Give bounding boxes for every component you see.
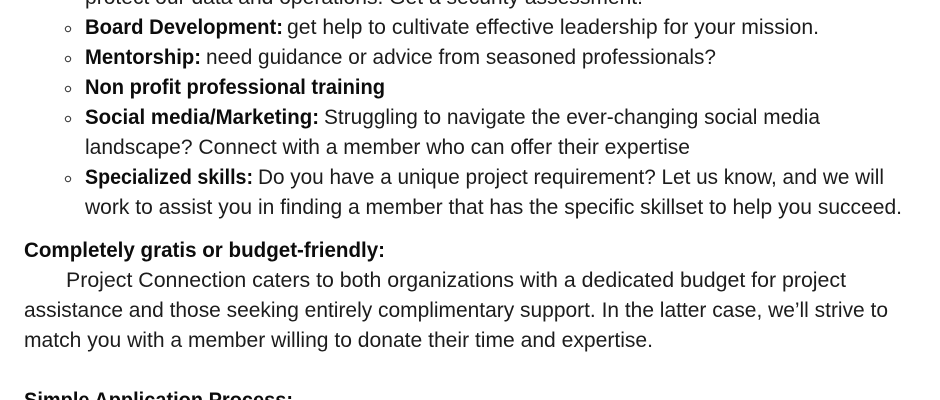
list item: specialized skills	[65, 166, 902, 219]
text block: project connection paragraph: assistance and those seeking entirely complimentary support. In the latter case, we’ll strive to	[24, 299, 888, 322]
list item: social media and marketing: Struggling to navigate the ever-changing social media	[324, 106, 820, 129]
list: services offered	[65, 0, 902, 219]
list item: social media and marketing: Social media/Marketing:	[85, 106, 319, 129]
list item: board development: Board Development:	[85, 16, 283, 39]
list item: specialized skills: Do you have a unique project requirement? Let us know, and we will	[258, 166, 884, 189]
text block: project connection paragraph: match you with a member willing to donate their time and expertise.	[24, 329, 653, 352]
list item: social media and marketing: landscape? Connect with a member who can offer their expertise	[85, 136, 690, 159]
list item: board development	[65, 16, 819, 39]
list item: non profit training: Non profit professional training	[85, 76, 385, 99]
list item: social media and marketing	[65, 106, 820, 159]
list item: specialized skills: work to assist you in finding a member that has the specific skillset to help you succeed.	[84, 196, 902, 219]
list item: specialized skills: Specialized skills:	[85, 166, 253, 189]
list item: mentorship: need guidance or advice from seasoned professionals?	[206, 46, 716, 69]
text block: project connection paragraph: Project Connection caters to both organizations with a dedicated budget for project	[66, 269, 846, 292]
text block: project connection paragraph	[24, 269, 888, 352]
list item: mentorship: Mentorship:	[85, 46, 201, 69]
list item: board development: get help to cultivate effective leadership for your mission.	[287, 16, 819, 39]
heading: completely gratis or budget-friendly: Completely gratis or budget-friendly:	[24, 239, 385, 262]
